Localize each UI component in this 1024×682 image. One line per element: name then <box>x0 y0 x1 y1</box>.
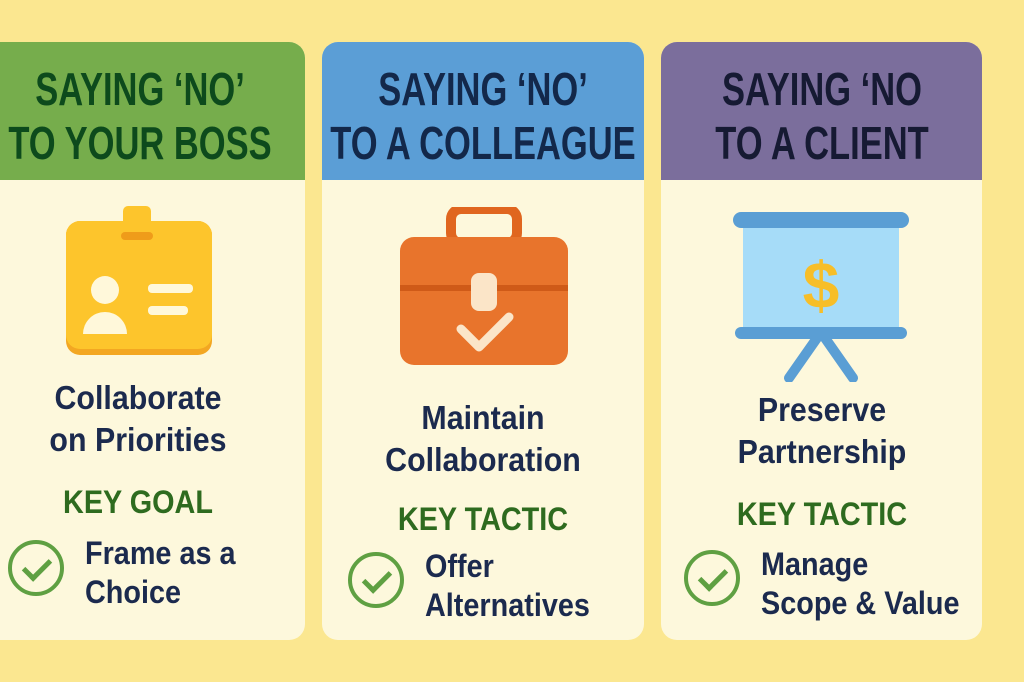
text: client goal <box>737 391 906 470</box>
icon: badge <box>66 206 212 355</box>
label: key tactic: KEY TACTIC <box>736 496 907 532</box>
header: boss: TO YOUR BOSS <box>8 117 271 169</box>
icon: check <box>684 550 740 606</box>
text: tactic <box>85 535 236 610</box>
text: colleague goal <box>385 399 581 478</box>
label: key goal: KEY GOAL <box>63 484 212 520</box>
panel: colleague <box>322 42 644 640</box>
header: client: SAYING ‘NO <box>721 63 922 115</box>
label: key tactic: KEY TACTIC <box>398 501 568 537</box>
header: boss <box>0 42 305 180</box>
text: tactic: Manage <box>761 546 868 582</box>
panel: client <box>661 42 982 640</box>
text: client goal: Partnership <box>737 433 906 470</box>
text: tactic: Scope & Value <box>761 585 959 621</box>
icon: presentation: $ <box>803 248 839 322</box>
text: colleague goal: Maintain <box>421 399 545 436</box>
text: tactic <box>425 548 590 623</box>
icon: briefcase <box>400 207 568 365</box>
text: tactic: Choice <box>85 574 181 610</box>
header: client <box>661 42 982 180</box>
panel: boss <box>0 42 305 640</box>
text: tactic: Offer <box>425 548 494 584</box>
text: colleague goal: Collaboration <box>385 441 581 478</box>
header: boss: SAYING ‘NO’ <box>35 63 244 115</box>
text: boss goal <box>49 379 226 458</box>
text: boss goal: on Priorities <box>49 421 226 458</box>
header: colleague: TO A COLLEAGUE <box>330 117 636 169</box>
text: tactic: Frame as a <box>85 535 235 571</box>
text: tactic: Alternatives <box>425 587 590 623</box>
text: boss goal: Collaborate <box>54 379 221 416</box>
icon: check <box>8 540 64 596</box>
icon: check <box>348 552 404 608</box>
text: client goal: Preserve <box>757 391 886 428</box>
icon: presentation <box>733 212 909 382</box>
header: colleague <box>322 42 644 180</box>
header: client: TO A CLIENT <box>715 117 928 169</box>
header: colleague: SAYING ‘NO’ <box>378 63 588 115</box>
text: tactic <box>761 546 959 621</box>
